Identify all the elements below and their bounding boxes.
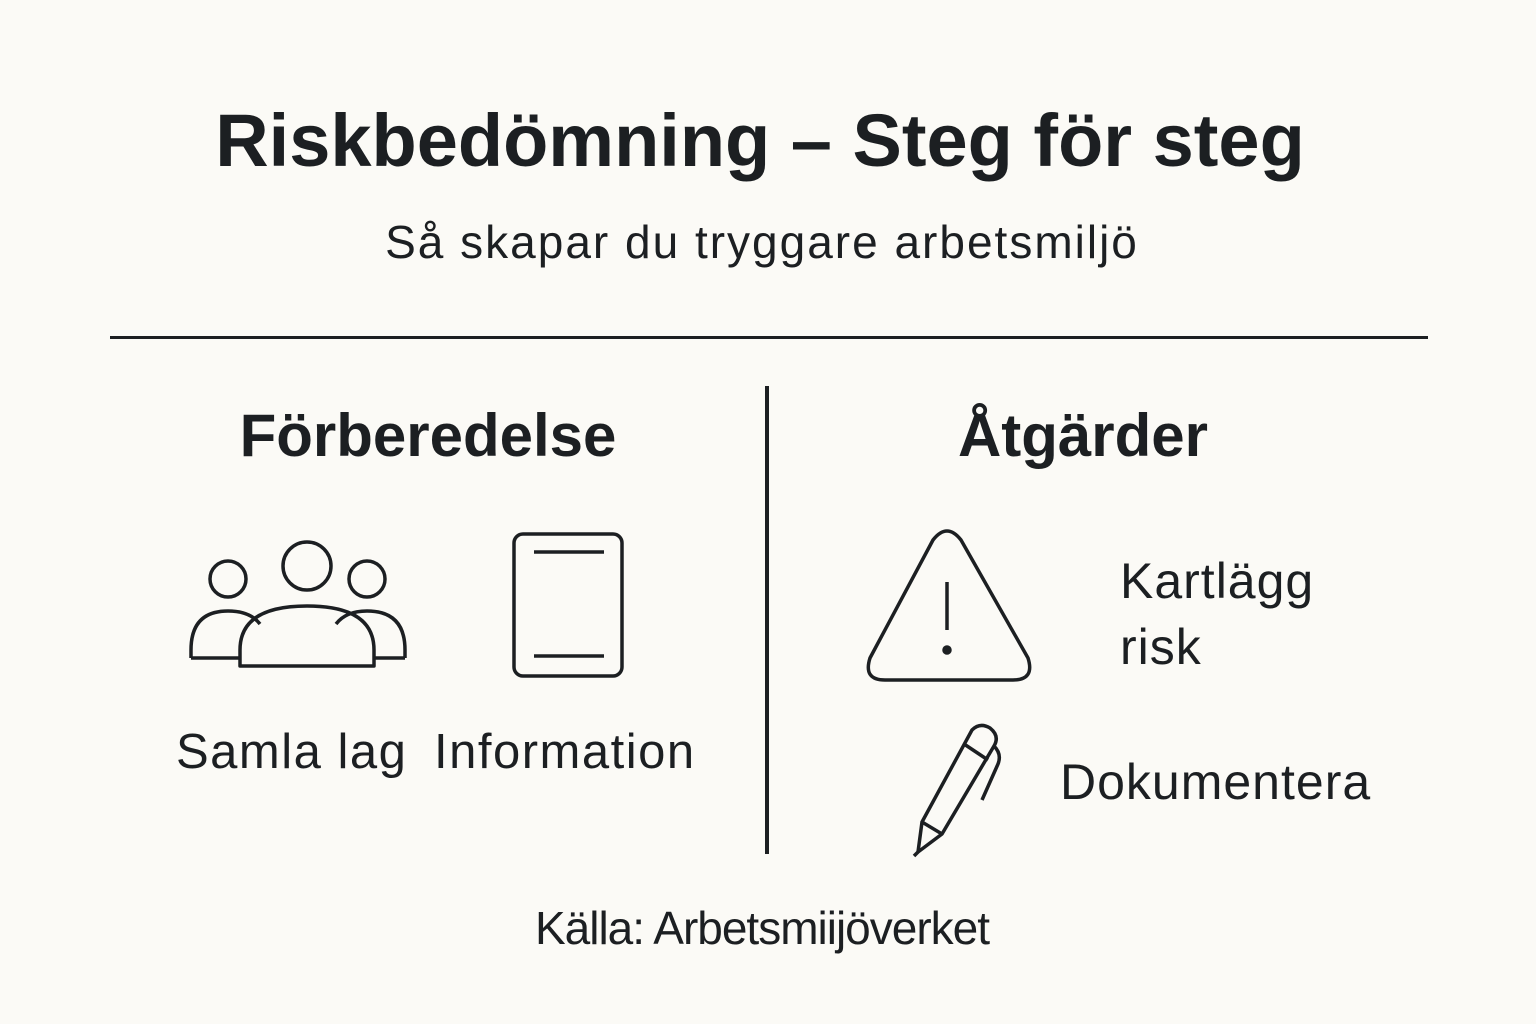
label: Information: Information — [434, 725, 696, 779]
icon: tablet — [512, 532, 624, 678]
icon: people group — [189, 540, 407, 668]
heading: Förberedelse: Förberedelse — [240, 402, 616, 469]
heading: Åtgärder: Åtgärder — [958, 402, 1208, 469]
label: Samla lag: Samla lag — [176, 725, 407, 779]
label: Kartlägg risk — [1120, 553, 1314, 675]
title: Riskbedömning – Steg för steg — [215, 99, 1305, 182]
subtitle: Så skapar du tryggare arbetsmiljö — [385, 216, 1139, 268]
label: Dokumentera: Dokumentera — [1060, 754, 1371, 810]
label: Kartlägg risk: Kartlägg — [1120, 553, 1314, 609]
icon: pencil — [912, 724, 1002, 858]
panel: förberedelse — [176, 402, 696, 779]
source: Källa: Arbetsmiijöverket — [535, 902, 989, 954]
label: Kartlägg risk: risk — [1120, 619, 1202, 675]
icon: warning triangle — [866, 529, 1032, 682]
panel: åtgärder — [866, 402, 1371, 858]
